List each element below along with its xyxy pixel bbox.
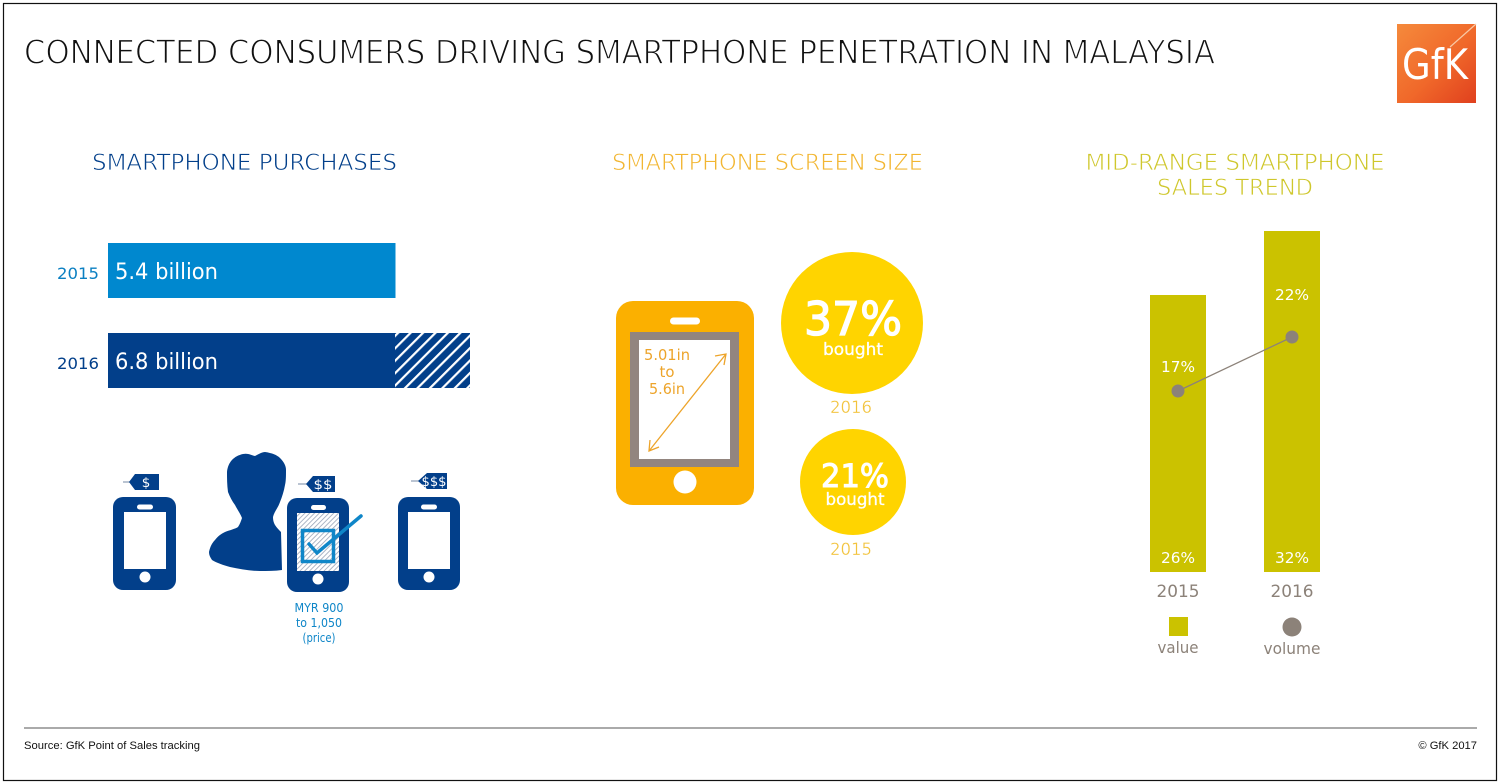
legend: value [1158, 617, 1198, 657]
year 2015: 2015 [830, 540, 872, 559]
screen size text: 5.6in [649, 380, 685, 398]
icon: high price phone: $$$ [422, 474, 446, 490]
icon: person silhouette [209, 452, 286, 571]
stat: 37% bought: 37% [804, 292, 902, 346]
heading: mid-range trend [1086, 150, 1384, 201]
screen size text [644, 346, 690, 398]
legend: value: value [1158, 638, 1198, 657]
stat: 21% bought: 21% [821, 457, 889, 495]
stat: 37% bought: bought [823, 340, 884, 359]
axis labels: 2015 [1156, 582, 1200, 602]
bar chart: value and volume [1150, 231, 1320, 602]
heading: mid-range trend: SALES TREND [1157, 175, 1313, 201]
heading: screen size: SMARTPHONE SCREEN SIZE [612, 150, 923, 176]
volume point 2015 [1172, 384, 1184, 398]
axis labels [1156, 582, 1314, 602]
icon: chosen mid price phone: $$ [314, 477, 332, 493]
panel: smartphone purchases [57, 150, 470, 645]
price label [294, 601, 344, 645]
legend: volume [1264, 618, 1320, 658]
screen size text: 5.01in [644, 346, 690, 364]
label 2016: 2016 [57, 354, 99, 373]
logo: GfK [1397, 24, 1476, 103]
data labels [1161, 286, 1309, 567]
volume point 2016 [1286, 330, 1298, 344]
price label: MYR 900 [294, 601, 344, 615]
stat: 21% bought [800, 429, 906, 535]
year 2016: 2016 [830, 398, 872, 417]
heading: mid-range trend: MID-RANGE SMARTPHONE [1086, 150, 1384, 176]
bar 2015 [108, 243, 396, 298]
stat: 37% bought [781, 252, 923, 394]
price label: to 1,050 [296, 616, 342, 630]
icon: chosen mid price phone [287, 476, 361, 592]
stat: 21% bought: bought [826, 490, 885, 509]
data labels: 17% [1161, 358, 1195, 376]
title: CONNECTED CONSUMERS DRIVING SMARTPHONE PENETRATION IN MALAYSIA [24, 32, 1215, 72]
legend: volume: volume [1264, 639, 1320, 658]
value 5.4 billion: 5.4 billion [115, 260, 218, 285]
value 6.8 billion: 6.8 billion [115, 350, 218, 375]
screen size text: to [660, 363, 674, 381]
bar 2016 [1264, 231, 1320, 572]
panel: mid-range sales trend [1086, 150, 1384, 658]
heading: smartphone purchases: SMARTPHONE PURCHASES [92, 150, 397, 176]
data labels: 32% [1275, 549, 1309, 567]
logo: GfK: GfK [1402, 40, 1469, 89]
icon: large screen phone [616, 301, 754, 505]
bar 2016 hatched increase [395, 333, 470, 388]
screen size arrow [649, 354, 726, 451]
icon: low price phone: $ [142, 475, 150, 491]
bar 2016 [108, 333, 396, 388]
panel: screen size [612, 150, 923, 559]
icon: low price phone [113, 474, 176, 590]
icon: high price phone [398, 473, 460, 590]
bar chart: purchases [57, 243, 470, 388]
volume trend line [1178, 337, 1292, 391]
source note: Source: GfK Point of Sales tracking [24, 740, 200, 752]
price label: (price) [302, 631, 336, 645]
data labels: 22% [1275, 286, 1309, 304]
axis labels: 2016 [1270, 582, 1314, 602]
bar 2015 [1150, 295, 1206, 572]
copyright: © GfK 2017 [1418, 740, 1477, 752]
data labels: 26% [1161, 549, 1195, 567]
label 2015: 2015 [57, 264, 99, 283]
